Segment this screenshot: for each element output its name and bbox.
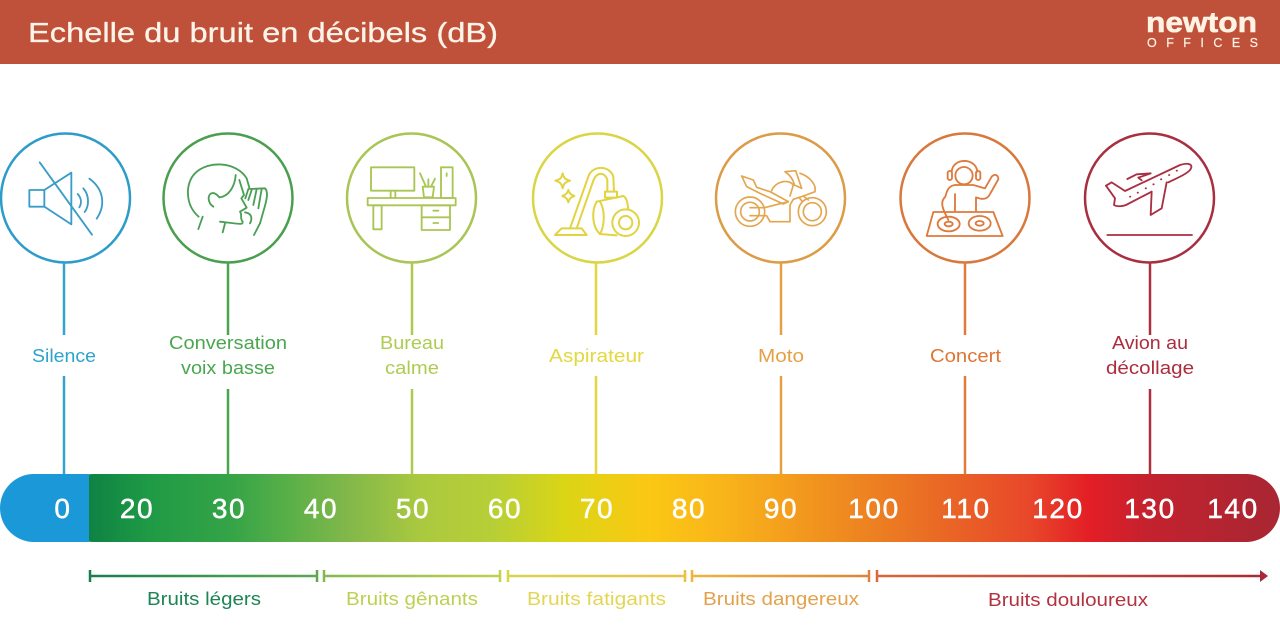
range: Bruits fatigants xyxy=(508,570,685,609)
scale numbers xyxy=(54,493,1259,524)
label: Aspirateur: Aspirateur xyxy=(549,346,644,366)
label: Bureau calme xyxy=(380,333,444,378)
scale numbers: 60 xyxy=(488,493,522,524)
scale numbers: 20 xyxy=(120,493,154,524)
scale numbers: 30 xyxy=(212,493,246,524)
label: Bureau calme: calme xyxy=(385,358,439,378)
range: Bruits dangereux: Bruits dangereux xyxy=(703,589,859,609)
header banner xyxy=(0,0,1280,64)
decibel scale bar xyxy=(0,474,1280,542)
range: Bruits fatigants: Bruits fatigants xyxy=(527,589,666,609)
scale numbers: 80 xyxy=(672,493,706,524)
icon: whispering face xyxy=(188,164,267,235)
label: Avion au décollage xyxy=(1106,333,1194,378)
icon: muted speaker xyxy=(29,162,102,235)
range: Bruits légers: Bruits légers xyxy=(147,589,261,609)
station: Moto xyxy=(716,134,845,474)
range: Bruits légers xyxy=(90,570,317,609)
logo: Newton Offices: OFFICES xyxy=(1147,36,1258,50)
range: Bruits gênants xyxy=(324,570,500,609)
scale numbers: 40 xyxy=(304,493,338,524)
label: Conversation voix basse: Conversation xyxy=(169,333,287,353)
icon: motorcycle xyxy=(735,171,826,226)
label: Silence: Silence xyxy=(32,346,96,366)
range: Bruits dangereux xyxy=(692,570,869,609)
scale numbers: 50 xyxy=(396,493,430,524)
scale numbers: 90 xyxy=(764,493,798,524)
label: Concert: Concert xyxy=(930,346,1001,366)
range: Bruits gênants: Bruits gênants xyxy=(346,589,478,609)
scale numbers: 140 xyxy=(1207,493,1259,524)
range: Bruits douloureux xyxy=(877,570,1268,610)
label: Bureau calme: Bureau xyxy=(380,333,444,353)
label: Avion au décollage: Avion au xyxy=(1112,333,1188,353)
range: Bruits douloureux: Bruits douloureux xyxy=(988,590,1148,610)
station: Bureau calme xyxy=(347,134,476,474)
label: Conversation voix basse: voix basse xyxy=(181,358,275,378)
logo: Newton Offices xyxy=(1146,7,1258,50)
title: Echelle du bruit en décibels (dB) xyxy=(28,17,498,48)
station: Silence xyxy=(1,134,130,474)
station: Avion au décollage xyxy=(1085,134,1214,474)
scale numbers: 0 xyxy=(54,493,72,524)
scale numbers: 130 xyxy=(1124,493,1176,524)
icon: vacuum cleaner xyxy=(555,168,639,236)
station: Concert xyxy=(900,134,1030,474)
station: Conversation voix basse xyxy=(164,134,292,474)
icon: DJ xyxy=(927,161,1003,236)
logo: Newton Offices: newton xyxy=(1146,7,1257,39)
scale numbers: 100 xyxy=(848,493,900,524)
scale numbers: 120 xyxy=(1032,493,1084,524)
station: Aspirateur xyxy=(533,134,662,474)
icon: office desk xyxy=(368,167,456,230)
label: Conversation voix basse xyxy=(169,333,287,378)
icon: plane taking off xyxy=(1106,164,1192,235)
label: Moto: Moto xyxy=(758,346,804,366)
label: Avion au décollage: décollage xyxy=(1106,358,1194,378)
scale numbers: 70 xyxy=(580,493,614,524)
scale numbers: 110 xyxy=(941,493,991,524)
